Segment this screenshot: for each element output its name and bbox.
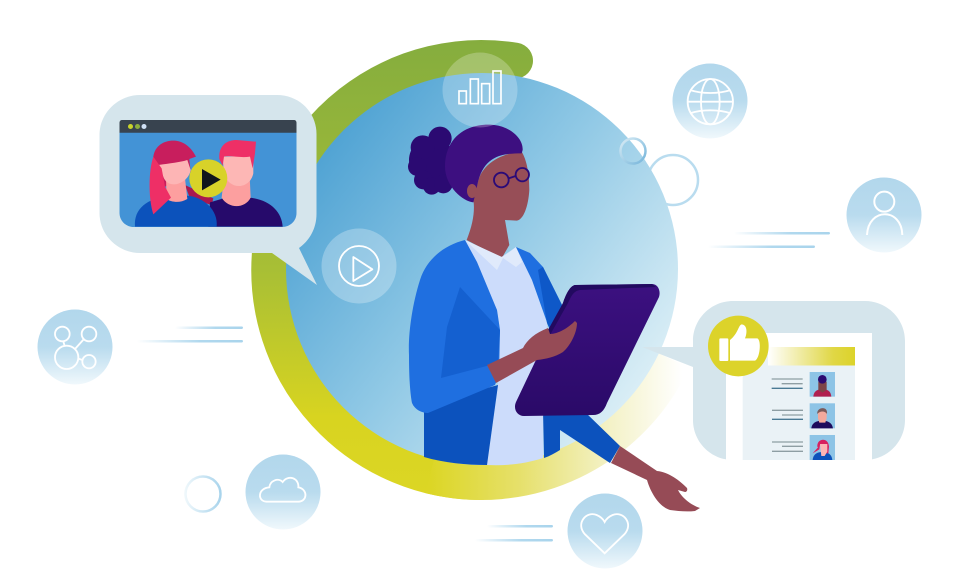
icon: play badge	[322, 228, 396, 304]
video speech bubble	[100, 95, 317, 285]
white document	[726, 333, 872, 460]
shirt	[465, 240, 547, 465]
icon: thumbs up	[708, 316, 769, 376]
jacket lower right	[543, 410, 560, 458]
small outline circle	[620, 138, 646, 164]
review speech bubble	[642, 301, 905, 460]
document inner panel	[743, 347, 855, 460]
tablet edge	[548, 284, 656, 335]
neck and face	[467, 152, 529, 258]
decorative ring arc	[269, 58, 673, 482]
avatar one	[810, 372, 835, 397]
tablet	[515, 284, 660, 416]
window dots	[128, 124, 146, 129]
jacket body lower left	[424, 385, 498, 465]
motion lines bottom	[475, 525, 553, 542]
row lines two	[772, 410, 803, 415]
motion lines right	[708, 232, 830, 248]
row lines one	[772, 379, 803, 384]
icon: network badge	[38, 310, 112, 384]
jacket upper and sleeve	[409, 240, 500, 413]
icon: person badge	[846, 178, 922, 252]
lower arm and hand	[611, 446, 700, 511]
people in video	[135, 140, 283, 227]
bubble shape	[100, 95, 317, 285]
icon: globe badge	[672, 64, 748, 138]
hair bun	[408, 127, 454, 195]
glasses	[494, 168, 529, 187]
review rows	[772, 372, 835, 460]
avatar three	[810, 435, 835, 460]
motion lines left	[137, 326, 243, 342]
icon: bar chart badge	[442, 52, 518, 128]
jacket right shade	[538, 267, 563, 330]
woman figure	[408, 125, 700, 511]
jacket shaded panel	[441, 287, 500, 378]
upper arm and hand	[487, 321, 577, 383]
head hair	[445, 125, 523, 202]
avatar two	[810, 403, 835, 428]
yellow header bar	[768, 347, 855, 366]
shirt collar	[465, 240, 522, 270]
main blue disc	[286, 73, 678, 465]
sleeve to lower hand	[545, 410, 620, 463]
row lines three	[772, 442, 803, 451]
jacket right side	[516, 247, 563, 325]
icon: heart badge	[568, 494, 642, 568]
ear	[467, 184, 477, 198]
video screen	[120, 125, 296, 227]
icon: cloud badge	[246, 454, 320, 530]
outline circle lower left	[186, 476, 220, 512]
bubble shape	[642, 301, 905, 460]
outline circle behind disc	[648, 155, 698, 205]
title bar	[120, 120, 296, 133]
